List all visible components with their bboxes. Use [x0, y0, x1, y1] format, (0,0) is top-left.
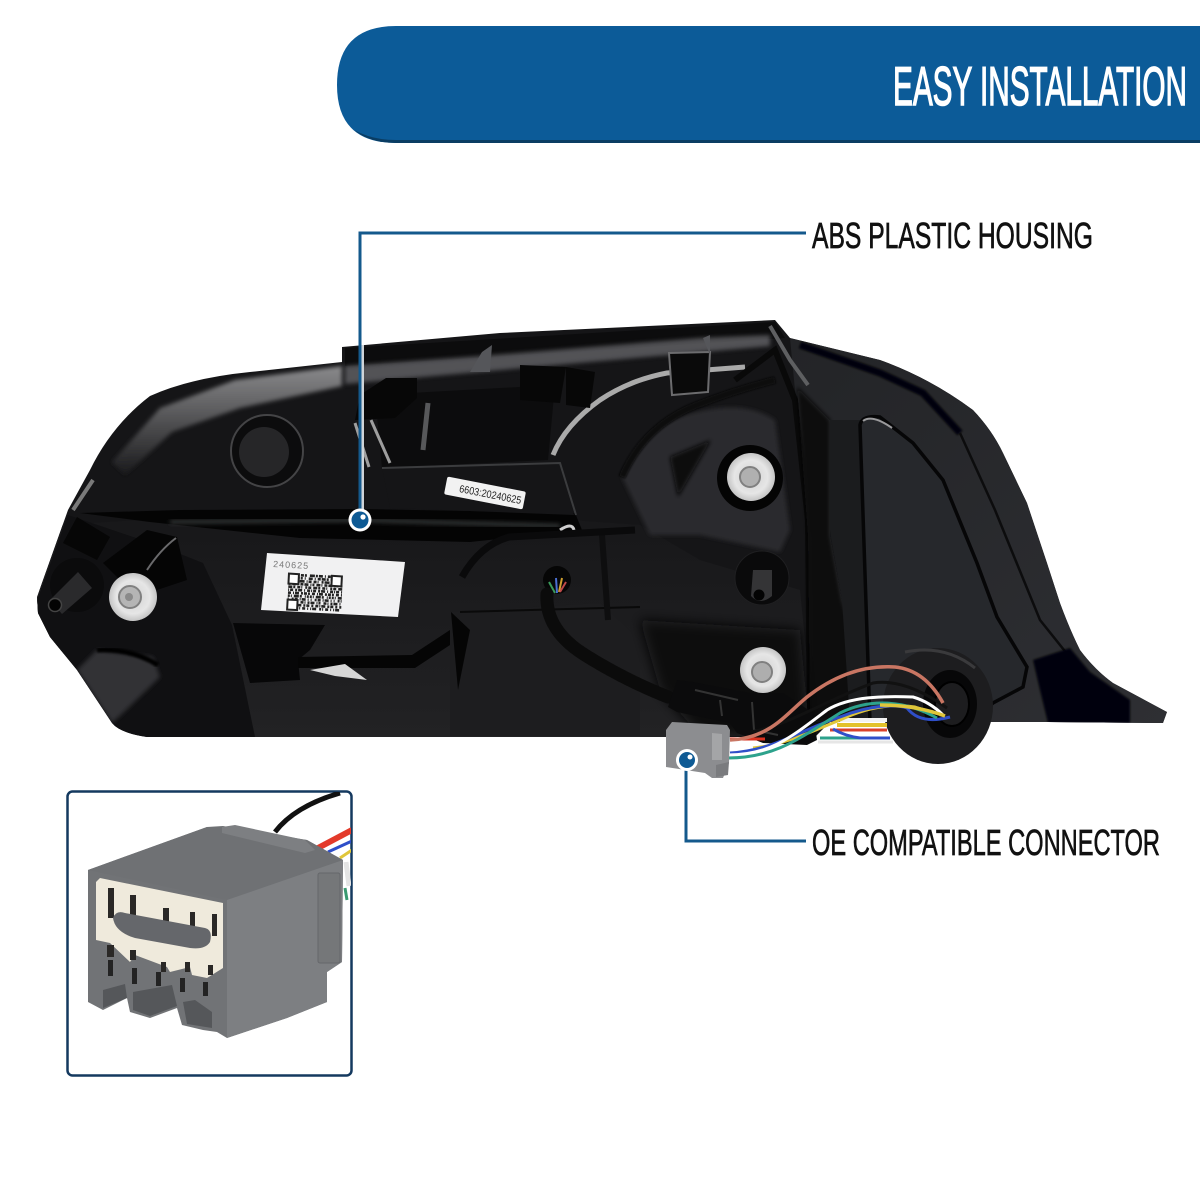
header banner — [337, 26, 1200, 143]
connector illustration — [88, 793, 352, 1038]
callout: OE compatible connector — [676, 749, 1160, 863]
housing surface shading — [30, 322, 1167, 740]
connector body — [88, 827, 343, 1038]
marker dot — [348, 508, 372, 532]
housing silhouette — [37, 320, 1167, 737]
latch feet — [103, 984, 212, 1028]
side face — [227, 860, 343, 1038]
QR sticker — [261, 553, 405, 617]
grey connector — [666, 722, 730, 778]
braided harness — [547, 594, 668, 697]
QR code — [287, 574, 343, 612]
leader line — [686, 770, 806, 841]
lower silver bolt — [740, 647, 786, 693]
upper right silver bolt — [717, 445, 783, 511]
inset: connector close-up — [68, 792, 352, 1076]
left vent nipple — [48, 558, 104, 614]
marker dot — [676, 749, 698, 771]
date code sticker — [444, 477, 526, 509]
callout: ABS plastic housing — [348, 215, 1093, 532]
right vent nipple — [735, 551, 789, 605]
white terminal block — [96, 878, 223, 978]
leader line — [361, 345, 364, 510]
wire grommet — [883, 648, 993, 764]
inset frame — [68, 792, 352, 1076]
upper grey latch — [113, 912, 211, 948]
QR sticker: 240625 — [273, 559, 309, 571]
date code sticker: 6603:20240625 — [458, 483, 522, 507]
terminal slots — [107, 888, 217, 975]
side clip — [318, 873, 340, 963]
contact slots — [108, 960, 208, 996]
top clip — [222, 825, 315, 853]
left silver bolt — [109, 573, 157, 621]
connector wires — [275, 793, 352, 900]
tail light housing — [30, 320, 1167, 778]
rubber plug — [231, 415, 303, 487]
top face — [88, 826, 343, 870]
wire exit hole — [543, 566, 571, 594]
black inline connector — [668, 680, 817, 745]
wiring bundle — [728, 667, 950, 758]
